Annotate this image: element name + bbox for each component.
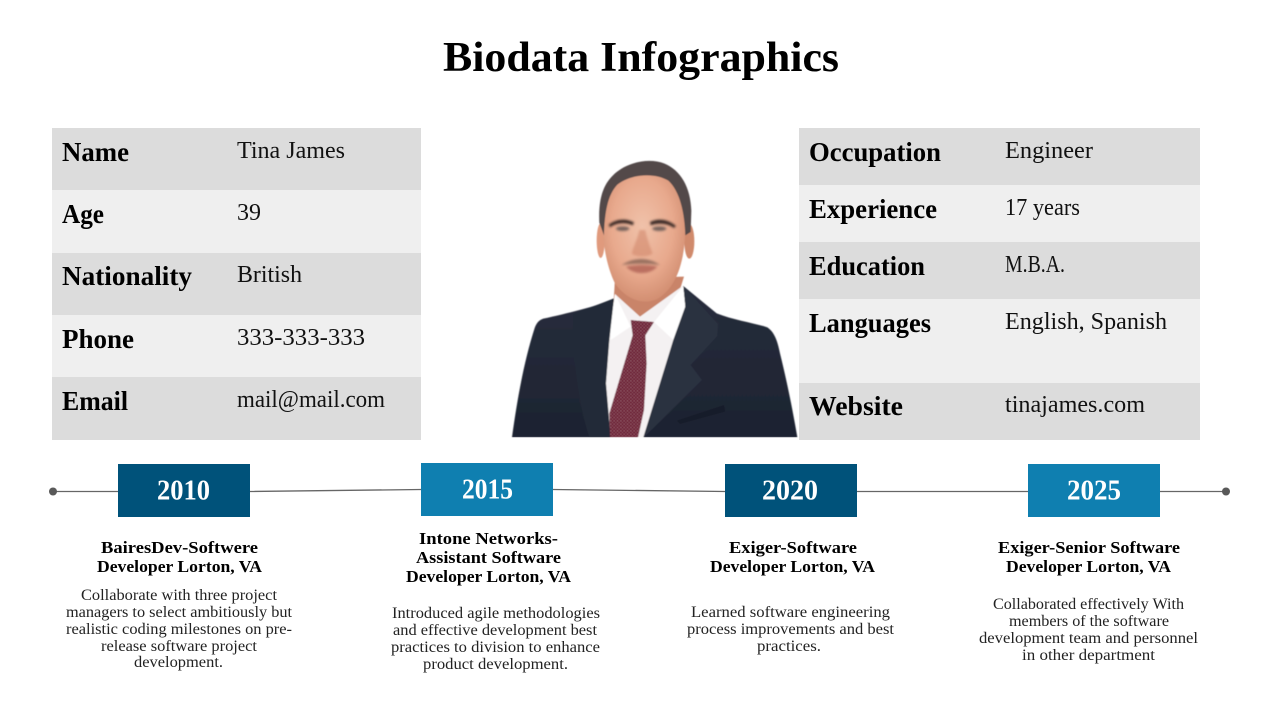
description 2025 <box>979 596 1199 664</box>
row: age: 39 <box>237 200 261 226</box>
milestone: 2015 <box>391 463 600 673</box>
panel: personal details table <box>52 128 421 440</box>
heading 2010: BairesDev-Softwere <box>101 538 258 557</box>
description 2020 <box>687 604 895 655</box>
heading 2020: Developer Lorton, VA <box>710 557 875 576</box>
shirt <box>605 285 685 437</box>
milestone: 2020 <box>687 464 895 655</box>
row: occupation <box>799 128 1200 185</box>
row: occupation: Engineer <box>1005 138 1093 164</box>
description 2025: development team and personnel <box>979 630 1199 647</box>
heading 2025: Exiger-Senior Software <box>998 538 1180 557</box>
heading 2010: Developer Lorton, VA <box>97 557 262 576</box>
description 2020: practices. <box>757 638 821 655</box>
heading 2015: Assistant Software <box>416 548 561 567</box>
row: website <box>799 383 1200 440</box>
year box 2025: 2025 <box>1067 476 1121 506</box>
row: experience: 17 years <box>1005 195 1080 221</box>
description 2010: realistic coding milestones on pre- <box>66 621 292 638</box>
suit jacket <box>512 298 614 437</box>
heading 2015: Intone Networks- <box>419 529 558 548</box>
timeline line <box>49 488 1230 496</box>
row: age: Age <box>62 199 104 229</box>
row: phone: Phone <box>62 324 134 354</box>
description 2025: Collaborated effectively With <box>993 596 1184 613</box>
row: website: Website <box>809 391 903 421</box>
year box 2020: 2020 <box>762 476 818 506</box>
year box 2015 <box>421 463 553 516</box>
row: experience <box>799 185 1200 242</box>
facial features <box>609 220 676 273</box>
row: occupation: Occupation <box>809 137 941 167</box>
milestone: 2025 <box>979 464 1199 664</box>
description 2020: process improvements and best <box>687 621 895 638</box>
row: email: mail@mail.com <box>237 387 385 413</box>
row: name <box>52 128 421 190</box>
panel: professional details table <box>799 128 1200 440</box>
row: languages: Languages <box>809 308 931 338</box>
year box 2015: 2015 <box>462 474 513 506</box>
hair <box>599 161 691 235</box>
row: experience: Experience <box>809 194 937 224</box>
heading 2015 <box>406 529 571 586</box>
row: nationality: Nationality <box>62 261 192 291</box>
face <box>603 173 685 302</box>
neck <box>613 277 684 320</box>
description 2025: in other department <box>1022 647 1156 664</box>
description 2015: product development. <box>423 656 568 673</box>
row: phone: 333-333-333 <box>237 325 365 351</box>
description 2010: development. <box>134 654 223 671</box>
description 2020: Learned software engineering <box>691 604 890 621</box>
description 2015: and effective development best <box>393 622 598 639</box>
description 2015 <box>391 605 600 673</box>
row: phone <box>52 315 421 377</box>
row: nationality <box>52 253 421 315</box>
heading 2020: Exiger-Software <box>729 538 857 557</box>
row: website: tinajames.com <box>1005 392 1145 418</box>
row: name: Name <box>62 137 129 167</box>
row: education <box>799 242 1200 299</box>
milestone: 2010 <box>66 464 293 671</box>
title: Biodata Infographics <box>443 35 839 81</box>
row: education: Education <box>809 251 925 281</box>
heading 2020 <box>710 538 875 576</box>
year box 2010 <box>118 464 250 517</box>
heading 2015: Developer Lorton, VA <box>406 567 571 586</box>
year box 2025 <box>1028 464 1160 517</box>
heading 2010 <box>97 538 262 576</box>
description 2025: members of the software <box>1009 613 1169 630</box>
description 2010: release software project <box>101 638 258 655</box>
row: name: Tina James <box>237 138 345 164</box>
heading 2025 <box>998 538 1180 576</box>
description 2010 <box>66 587 293 671</box>
description 2015: practices to division to enhance <box>391 639 600 656</box>
year box 2010: 2010 <box>157 476 210 506</box>
year box 2020 <box>725 464 857 517</box>
row: age <box>52 190 421 253</box>
necktie <box>609 320 654 437</box>
row: email <box>52 377 421 440</box>
portrait photo <box>512 161 797 437</box>
description 2015: Introduced agile methodologies <box>392 605 600 622</box>
heading 2025: Developer Lorton, VA <box>1006 557 1171 576</box>
row: email: Email <box>62 386 128 416</box>
row: languages: English, Spanish <box>1005 309 1167 335</box>
row: nationality: British <box>237 262 302 288</box>
ears <box>597 223 605 258</box>
row: education: M.B.A. <box>1005 252 1065 278</box>
row: languages <box>799 299 1200 383</box>
description 2010: managers to select ambitiously but <box>66 604 293 621</box>
description 2010: Collaborate with three project <box>81 587 278 604</box>
